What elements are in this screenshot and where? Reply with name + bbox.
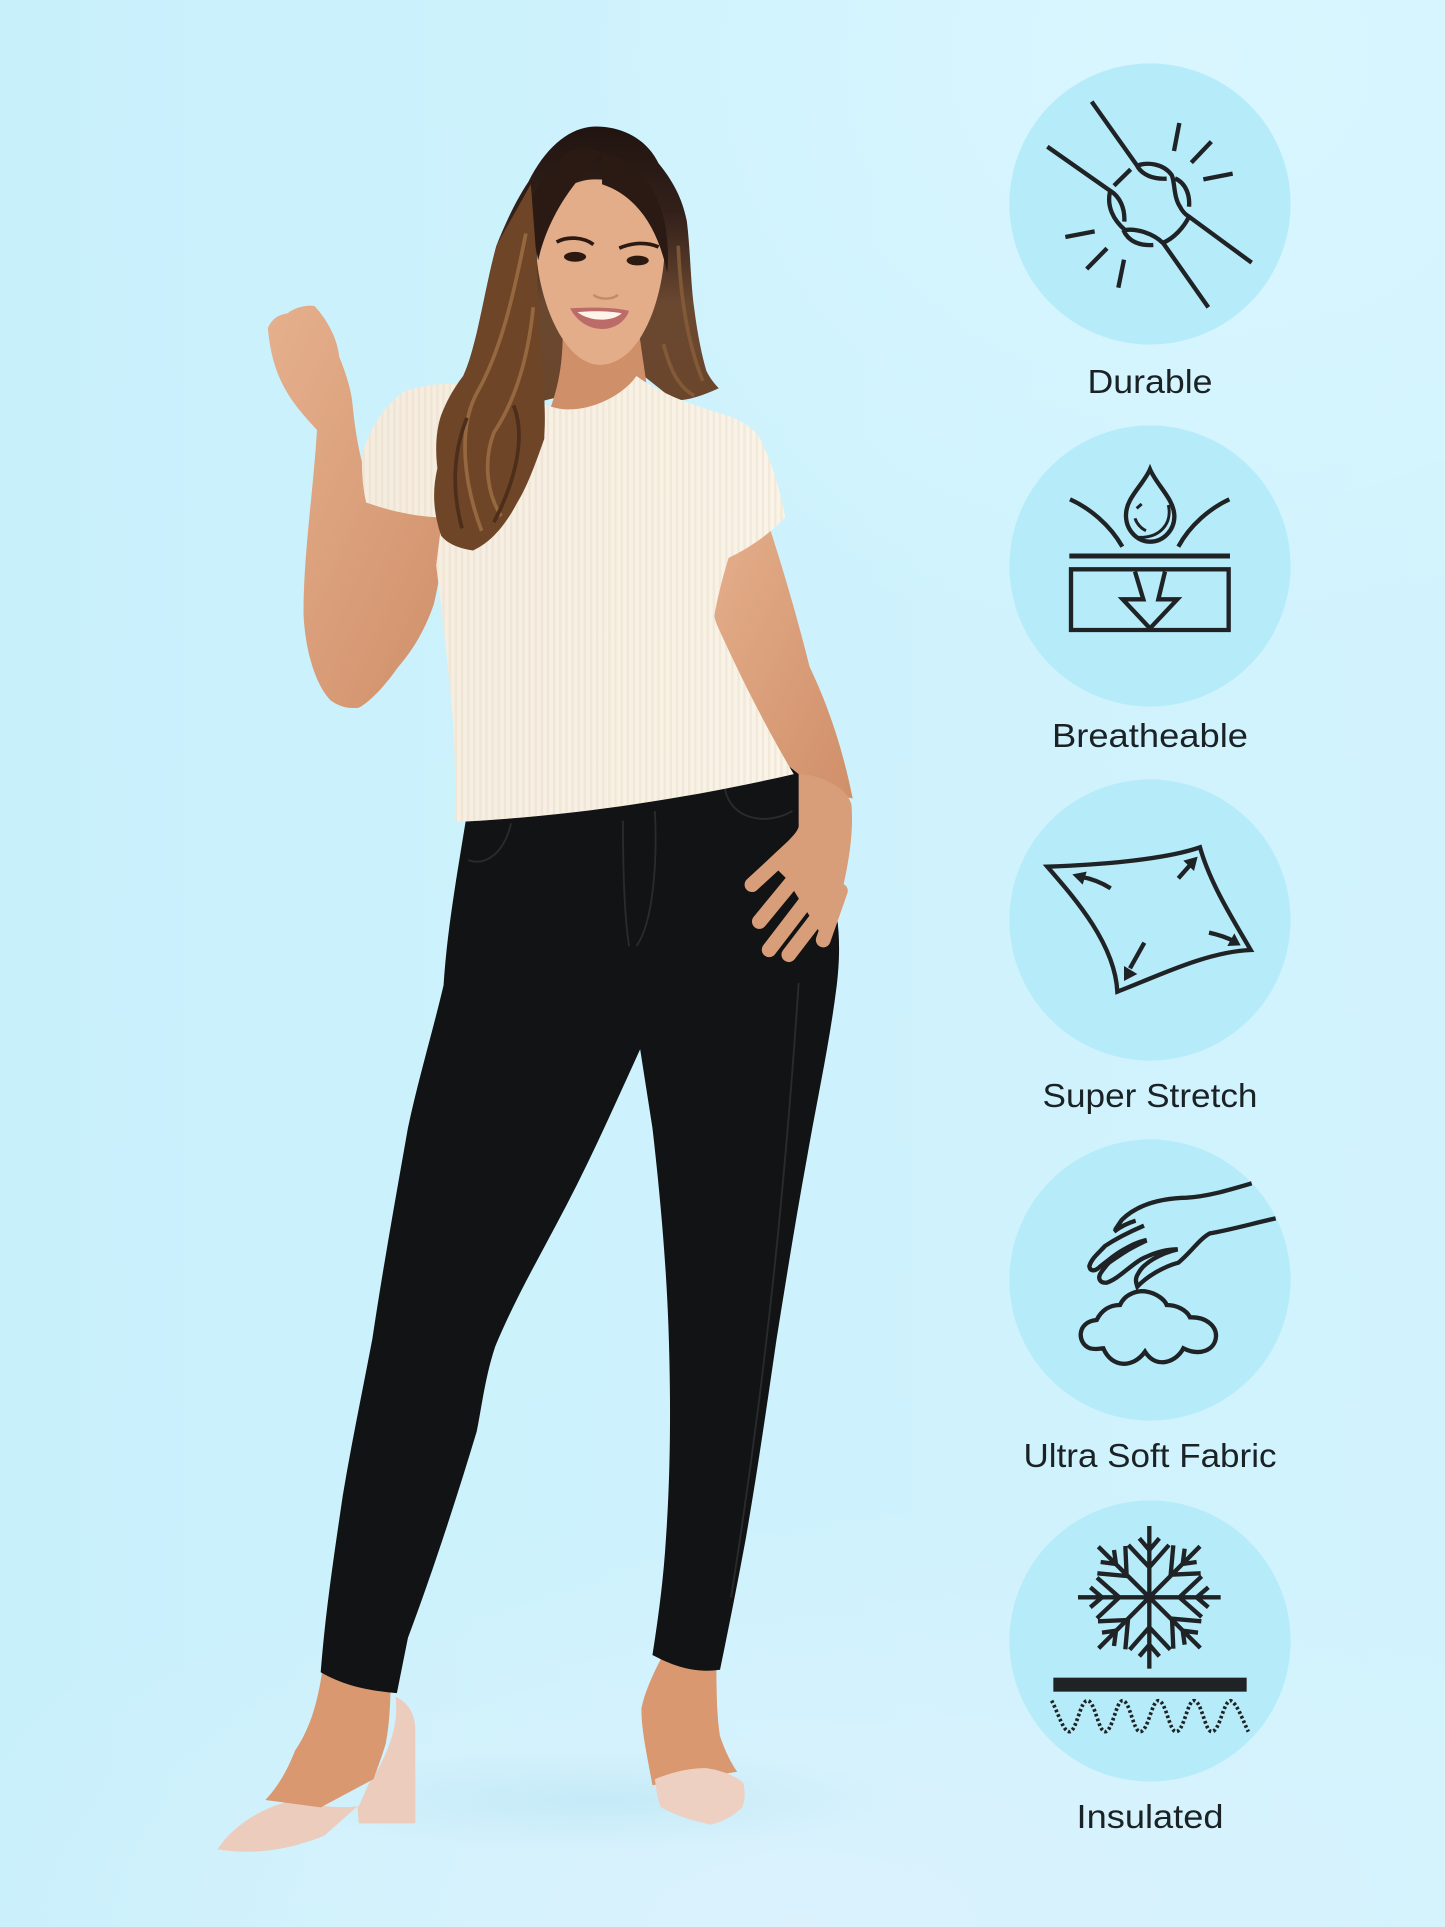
front hair fringe xyxy=(528,148,668,273)
hair wave highlights xyxy=(663,246,703,396)
icon: knotted threads xyxy=(1047,102,1252,307)
face xyxy=(537,179,665,365)
feature: Insulated xyxy=(1009,1500,1291,1835)
icon: stretched fabric with arrows xyxy=(1047,847,1251,992)
left shoe and foot xyxy=(217,1665,415,1852)
model photo illustration xyxy=(217,127,909,1852)
feature: Breatheable xyxy=(1009,425,1291,754)
circle xyxy=(1009,1500,1291,1782)
black jeggings xyxy=(321,764,839,1693)
label: Super Stretch xyxy=(1042,1077,1258,1114)
floor shadow xyxy=(295,1748,909,1852)
eyes, brows, mouth xyxy=(557,238,659,329)
label: Breatheable xyxy=(1052,717,1248,754)
label: Insulated xyxy=(1076,1798,1224,1835)
back hair xyxy=(434,127,719,550)
label: Durable xyxy=(1088,363,1212,400)
icon: hand over cloud xyxy=(1081,1183,1276,1364)
feature: Ultra Soft Fabric xyxy=(1009,1139,1291,1474)
feature: Super Stretch xyxy=(1009,779,1291,1114)
right arm behind xyxy=(707,504,853,799)
circle xyxy=(1009,1139,1291,1421)
ribbed white tee xyxy=(362,376,794,822)
front hair waves xyxy=(434,184,545,550)
circle xyxy=(1009,63,1291,345)
hand on hip xyxy=(752,774,852,955)
label: Ultra Soft Fabric xyxy=(1024,1437,1276,1474)
neck xyxy=(547,332,649,418)
icon: water drop through fabric xyxy=(1069,469,1230,630)
circle xyxy=(1009,425,1291,707)
icon: snowflake above insulation layer xyxy=(1052,1526,1248,1732)
circle xyxy=(1009,779,1291,1061)
right shoe and foot xyxy=(641,1659,745,1825)
feature: Durable xyxy=(1009,63,1291,400)
raised arm and hand xyxy=(268,306,455,708)
